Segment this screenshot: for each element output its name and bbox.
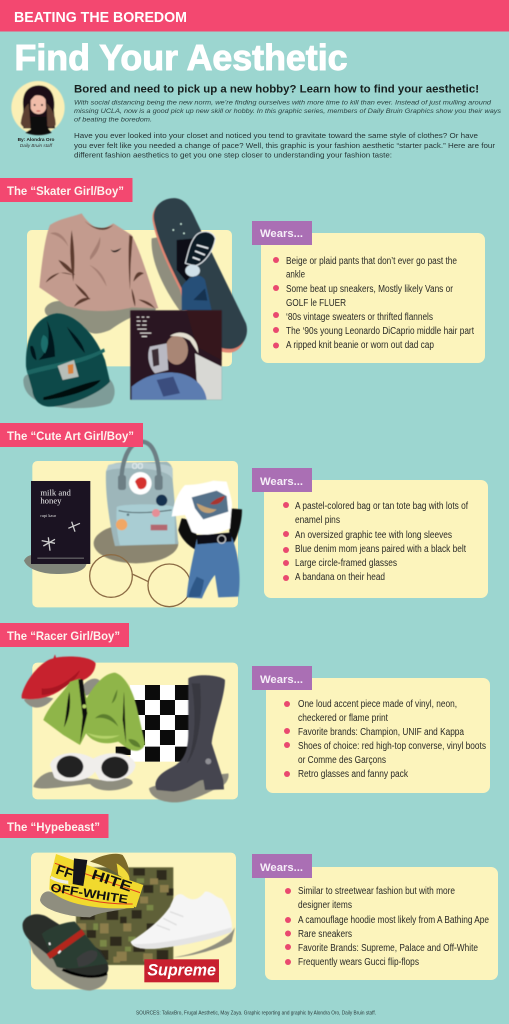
list text: Favorite brands: Champion, UNIF and Kappa <box>298 727 464 738</box>
list text: An oversized graphic tee with long sleeves <box>295 530 452 541</box>
list text: A bandana on their head <box>295 572 385 583</box>
section tag: skater <box>0 178 132 202</box>
author avatar and byline <box>11 81 65 148</box>
icon: graphic tee and jeans outfit <box>172 481 242 598</box>
icon: green jacket <box>43 673 145 751</box>
italic intro text <box>74 100 501 124</box>
subheading: Bored and need to pick up a new hobby? Learn how to find your aesthetic! <box>74 84 479 96</box>
icon: platform boot <box>149 675 229 802</box>
panel: hypebeast wears list <box>252 854 498 980</box>
list text <box>298 699 486 780</box>
panel: racer wears list <box>252 666 490 793</box>
list text: designer items <box>298 900 352 911</box>
wears tag: Wears... <box>260 862 303 874</box>
icon: white sunglasses <box>33 753 136 790</box>
icon: backpack <box>94 442 178 563</box>
section tag: racer <box>0 623 129 647</box>
section tag: skater: The “Skater Girl/Boy” <box>7 186 124 198</box>
body intro text: different fashion aesthetics to get you one step closer to understanding your fashion taste: <box>74 150 392 160</box>
list text: The ‘90s young Leonardo DiCaprio middle hair part <box>286 326 474 337</box>
panel: cute art wears list <box>252 468 488 598</box>
icon: book: honey <box>40 496 62 506</box>
icon: off-white belt: HITE <box>90 866 134 895</box>
list text: Blue denim mom jeans paired with a black belt <box>295 544 466 555</box>
icon: supreme box logo: Supreme <box>147 961 216 980</box>
wears tag <box>252 854 312 878</box>
wears tag: Wears... <box>260 228 303 240</box>
panel: hypebeast illustration <box>23 853 236 991</box>
list text: Some beat up sneakers, Mostly likely Vans or <box>286 284 454 295</box>
icon: book: rupi kaur <box>40 513 57 518</box>
list text: GOLF le FLUER <box>286 298 346 309</box>
wears tag: Wears... <box>260 674 303 686</box>
list text: Large circle-framed glasses <box>295 558 397 569</box>
icon: round glasses <box>90 555 191 607</box>
panel: skater wears list <box>252 221 485 363</box>
bullet markers <box>273 257 279 348</box>
list text: One loud accent piece made of vinyl, neon, <box>298 699 457 710</box>
list text: ‘80s vintage sweaters or thrifted flannels <box>286 312 433 323</box>
source credit: SOURCES: TaliaxBro, Frugal Aesthetic, May Zaya. Graphic reporting and graphic by Alondra Oro, Daily Bruin staff. <box>136 1010 376 1016</box>
wears tag: Wears... <box>260 476 303 488</box>
wears tag <box>252 221 312 245</box>
icon: off-white belt: OFF-WHITE <box>50 880 129 907</box>
list text: A pastel-colored bag or tan tote bag with lots of <box>295 501 468 512</box>
list text: Frequently wears Gucci flip-flops <box>298 957 419 968</box>
icon: beanie <box>23 313 115 408</box>
list text: Favorite Brands: Supreme, Palace and Off-White <box>298 943 478 954</box>
list text: A ripped knit beanie or worn out dad cap <box>286 340 434 351</box>
icon: book <box>24 481 90 574</box>
panel: cute art illustration <box>24 442 242 607</box>
italic intro text: With social distancing being the new norm, we’re finding ourselves with more time to kill than ever. Instead of just mulling around <box>74 100 492 106</box>
list text <box>286 256 474 351</box>
header banner <box>0 0 509 32</box>
section tag: cute art <box>0 423 143 447</box>
list text <box>295 501 468 583</box>
body intro text: Have you ever looked into your closet and noticed you tend to gravitate toward the same style of clothes? Or have <box>74 131 478 140</box>
list text: ankle <box>286 270 305 280</box>
icon: off-white belt: FF <box>54 861 76 882</box>
icon: sweater <box>39 213 158 334</box>
header banner: BEATING THE BOREDOM <box>14 9 187 26</box>
list text: Rare sneakers <box>298 929 352 940</box>
section tag: hypebeast: The “Hypebeast” <box>7 822 100 834</box>
body intro text <box>74 131 496 160</box>
icon: slide sandal <box>23 914 108 991</box>
bullet markers <box>283 502 289 581</box>
author avatar and byline: Daily Bruin staff <box>20 143 53 148</box>
title: Find Your Aesthetic <box>14 37 348 78</box>
photo: album cover <box>130 310 222 400</box>
body intro text: you ever felt like you needed a change of pace? Well, this graphic is your fashion aesthetic “starter pack.” Here are four <box>74 141 496 150</box>
list text: enamel pins <box>295 515 340 526</box>
list text: Retro glasses and fanny pack <box>298 769 409 780</box>
icon: skateboard <box>152 198 247 353</box>
list text: checkered or flame print <box>298 713 388 724</box>
icon: camo hoodie <box>76 867 173 965</box>
italic intro text: missing UCLA, now is a good pick up new skill or hobby. In this graphic series, members of Daily Bruin Graphics show you their ways <box>74 108 501 115</box>
icon: off-white belt <box>40 854 143 917</box>
section tag: hypebeast <box>0 814 108 838</box>
bullet markers <box>285 888 291 965</box>
author avatar and byline: By: Alondra Oro <box>18 137 54 143</box>
icon: white sneaker <box>131 891 235 957</box>
icon: checkered fabric <box>116 685 190 762</box>
bullet markers <box>284 701 290 777</box>
list text: or Comme des Garçons <box>298 755 386 766</box>
wears tag <box>252 468 312 492</box>
icon: book: milk and <box>40 488 72 498</box>
section tag: racer: The “Racer Girl/Boy” <box>7 631 120 643</box>
list text <box>298 886 489 968</box>
icon: beret <box>22 654 102 708</box>
section tag: cute art: The “Cute Art Girl/Boy” <box>7 431 134 443</box>
panel: racer illustration <box>22 654 238 802</box>
list text: Similar to streetwear fashion but with more <box>298 886 455 897</box>
italic intro text: of beating the boredom. <box>74 116 152 124</box>
wears tag <box>252 666 312 690</box>
list text: Beige or plaid pants that don’t ever go past the <box>286 256 457 267</box>
panel: skater illustration <box>23 198 247 408</box>
